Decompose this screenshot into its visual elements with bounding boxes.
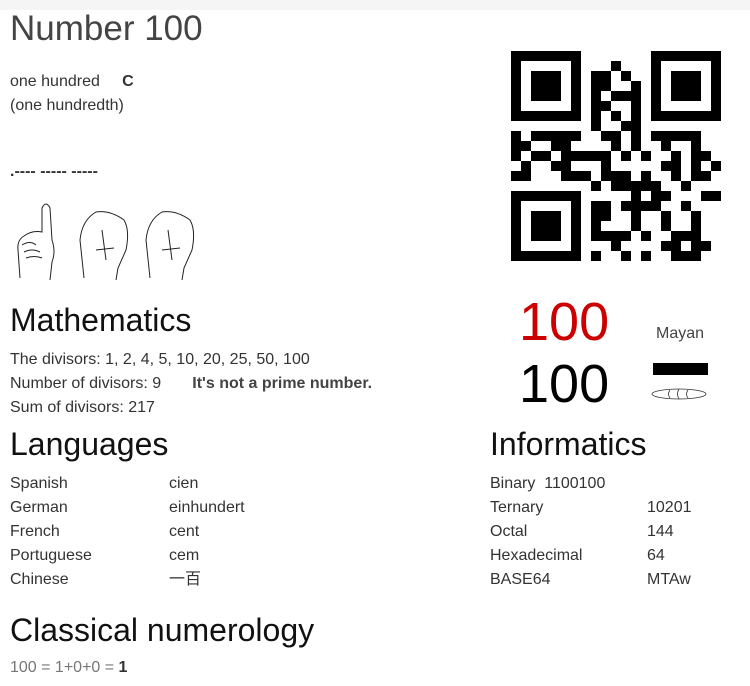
languages table: Spanish [10, 475, 68, 492]
informatics table: Hexadecimal [490, 547, 582, 564]
informatics table: 144 [647, 523, 674, 540]
languages table: French [10, 523, 60, 540]
name text: one hundred C [10, 73, 134, 90]
math text: Number of divisors: 9 It's not a prime number. [10, 375, 372, 392]
languages table: Portuguese [10, 547, 92, 564]
mayan label: Mayan [656, 325, 704, 342]
informatics table: 10201 [647, 499, 692, 516]
sign language hands [17, 204, 194, 280]
big red number: 100 [519, 292, 609, 352]
languages table: 一百 [169, 571, 201, 588]
languages table: cent [169, 523, 199, 540]
heading: classical numerology: Classical numerology [10, 612, 314, 648]
math text [10, 351, 372, 416]
informatics table: MTAw [647, 571, 691, 588]
title: Number 100 [10, 9, 203, 48]
informatics table: 64 [647, 547, 665, 564]
heading: mathematics: Mathematics [10, 302, 191, 338]
informatics table [490, 475, 692, 588]
informatics table: BASE64 [490, 571, 550, 588]
math text: The divisors: 1, 2, 4, 5, 10, 20, 25, 50, 100 [10, 351, 310, 368]
languages table: German [10, 499, 68, 516]
languages table [10, 475, 245, 588]
math text: Sum of divisors: 217 [10, 399, 155, 416]
mayan numeral [652, 363, 708, 400]
languages table: einhundert [169, 499, 245, 516]
languages table: Chinese [10, 571, 69, 588]
informatics table: Ternary [490, 499, 543, 516]
informatics table: Octal [490, 523, 527, 540]
name text: (one hundredth) [10, 97, 124, 114]
morse code: .---- ----- ----- [10, 163, 98, 180]
informatics table: Binary 1100100 [490, 475, 605, 492]
QR code [511, 51, 721, 261]
heading: informatics: Informatics [490, 426, 646, 462]
languages table: cien [169, 475, 198, 492]
name text [10, 73, 134, 114]
numerology text: 100 = 1+0+0 = 1 [10, 659, 127, 676]
heading: languages: Languages [10, 426, 168, 462]
big black number: 100 [519, 354, 609, 414]
languages table: cem [169, 547, 199, 564]
